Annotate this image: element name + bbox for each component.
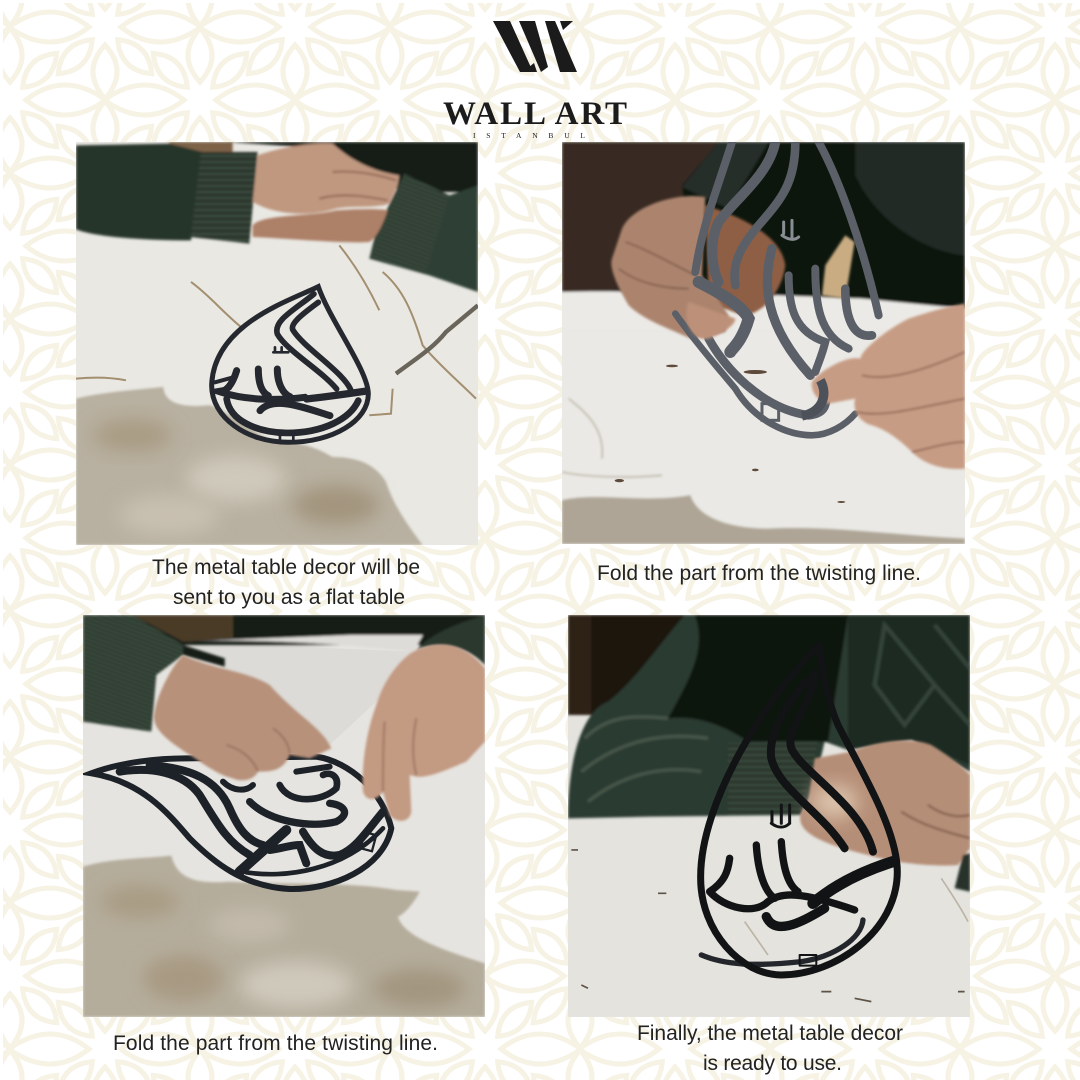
icon: decor lying while being folded bbox=[91, 757, 391, 889]
sweater and hands bbox=[76, 142, 478, 292]
caption: step 1: The metal table decor will be bbox=[152, 556, 420, 579]
logo tagline: ISTANBUL bbox=[473, 131, 585, 140]
caption: step 4: Finally, the metal table decor bbox=[637, 1022, 903, 1045]
metal hook over thumb bbox=[802, 380, 824, 416]
caption: step 4 bbox=[637, 1022, 903, 1075]
panel: step 1 photo, flat decor on table bbox=[76, 142, 478, 545]
hand behind decor bbox=[611, 196, 855, 339]
table specks bbox=[571, 850, 968, 1002]
panel: step 4 photo, decor standing bbox=[568, 615, 970, 1017]
logo: Wall Art Istanbul bbox=[443, 21, 627, 140]
sweater and background bbox=[83, 615, 485, 732]
table specks bbox=[615, 365, 845, 503]
logo wordmark: WALL ART bbox=[443, 96, 627, 132]
panel: step 3 photo, bending flat on table bbox=[83, 615, 485, 1017]
hands bbox=[154, 644, 485, 821]
hand bbox=[800, 741, 970, 892]
backdrop and sweater bbox=[568, 615, 970, 818]
panel: step 2 photo, folding the decor bbox=[562, 142, 965, 544]
icon: folded metal decor bbox=[675, 142, 879, 435]
icon: flat metal teardrop decor bbox=[212, 287, 368, 442]
caption: step 4: is ready to use. bbox=[703, 1052, 842, 1075]
stone marble area bbox=[76, 245, 478, 545]
caption: step 1 bbox=[152, 556, 420, 609]
icon: WA monogram bbox=[493, 21, 577, 72]
stone marble area bbox=[83, 856, 485, 1017]
caption: step 2: Fold the part from the twisting line. bbox=[597, 562, 921, 585]
caption: step 1: sent to you as a flat table bbox=[173, 586, 405, 609]
right hand holding decor bbox=[687, 302, 965, 469]
tabletop shading bbox=[194, 646, 408, 744]
caption: step 3: Fold the part from the twisting line. bbox=[113, 1032, 438, 1055]
icon: standing teardrop decor bbox=[697, 700, 901, 978]
backdrop and sweater bbox=[562, 142, 965, 544]
